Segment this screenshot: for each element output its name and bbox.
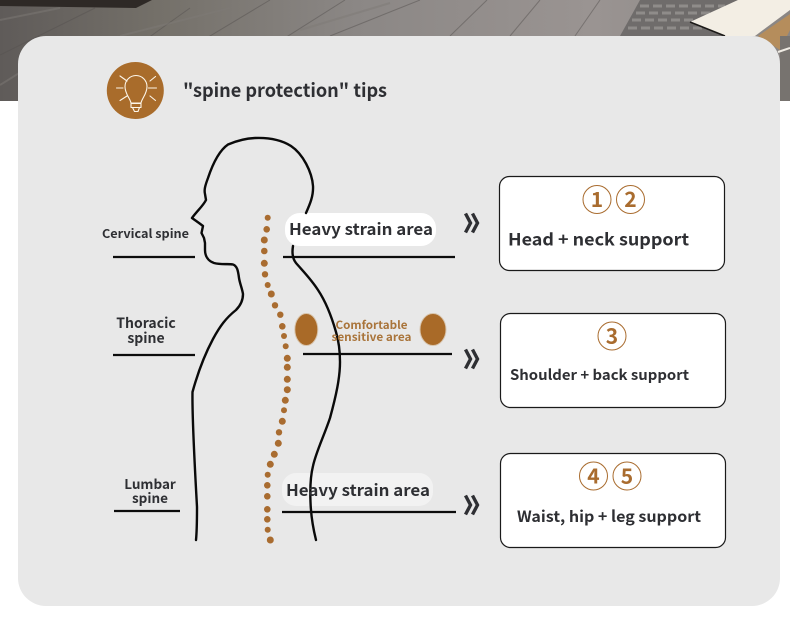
card: shoulder and back support: [500, 314, 726, 408]
arrow: lower: [466, 496, 478, 514]
callout: comfortable sensitive area: [295, 314, 452, 354]
card: shoulder and back support: 3: [606, 320, 618, 350]
label: thoracic spine: [113, 313, 195, 355]
spine dots: [261, 215, 291, 543]
card: waist, hip and leg support: [500, 454, 726, 548]
arrow: middle: [466, 350, 478, 368]
icon: light bulb badge: [107, 62, 164, 119]
human body outline: [192, 138, 340, 540]
card: head and neck support: 1: [591, 184, 603, 214]
card: waist, hip and leg support: 5: [621, 460, 633, 490]
card: waist, hip and leg support: 4: [587, 460, 600, 490]
label: cervical spine: [102, 225, 195, 257]
label: cervical spine: Cervical spine: [102, 225, 189, 242]
card: shoulder and back support: Shoulder + back support: [510, 364, 689, 385]
callout: comfortable sensitive area: Comfortable: [336, 317, 408, 333]
white highlight: lower heavy strain area: [282, 473, 433, 506]
background photo: wooden floor: [0, 0, 790, 101]
card: head and neck support: Head + neck support: [508, 226, 689, 250]
card: head and neck support: [500, 176, 724, 270]
callout: comfortable sensitive area: sensitive area: [332, 329, 412, 345]
callout: upper heavy strain area: Heavy strain area: [289, 216, 433, 240]
label: lumbar spine: spine: [132, 487, 168, 507]
label: lumbar spine: Lumbar: [124, 473, 176, 493]
callout: lower heavy strain area: Heavy strain area: [286, 477, 430, 501]
label: thoracic spine: spine: [127, 328, 165, 348]
white highlight: upper heavy strain area: [285, 213, 436, 246]
card: waist, hip and leg support: Waist, hip + leg support: [517, 505, 701, 527]
label: lumbar spine: [114, 473, 180, 511]
card: head and neck support: 2: [624, 184, 637, 214]
label: thoracic spine: Thoracic: [116, 313, 176, 333]
title: "spine protection" tips: [183, 77, 387, 103]
arrow: upper: [466, 214, 478, 232]
